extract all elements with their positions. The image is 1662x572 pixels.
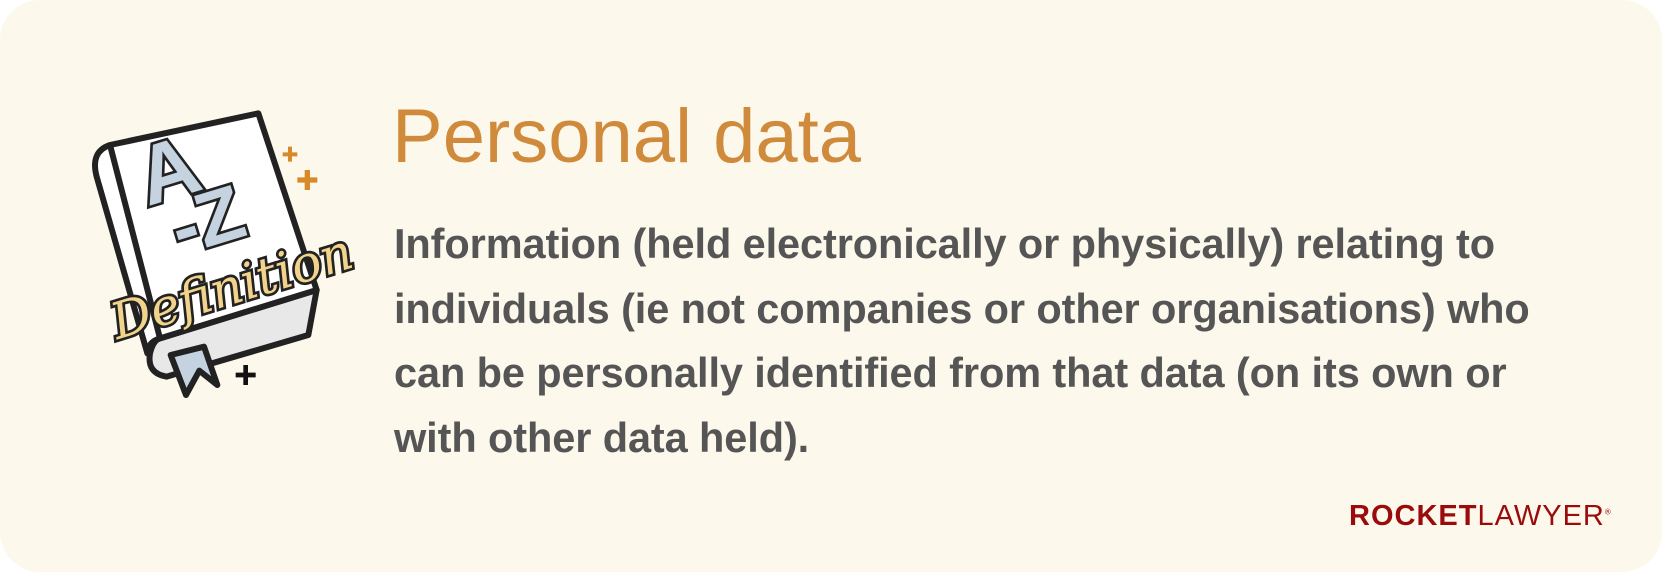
Definition script: Definition	[103, 222, 359, 351]
letters A-Z: -Z	[160, 169, 254, 272]
bookmark	[171, 347, 217, 395]
logo: ROCKETLAWYER®	[1349, 500, 1612, 532]
body text: can be personally identified from that data (on its own or	[394, 349, 1507, 396]
letters A-Z: A	[126, 117, 211, 223]
letters A-Z	[126, 109, 254, 277]
icon: definition book	[92, 110, 359, 398]
book cover	[95, 113, 317, 353]
title: Personal data	[392, 94, 861, 179]
body text: Information (held electronically or physically) relating to	[394, 220, 1495, 267]
body text: individuals (ie not companies or other organisations) who	[394, 284, 1530, 332]
sparkles	[236, 147, 317, 385]
body text: with other data held).	[394, 414, 809, 460]
body text	[394, 220, 1530, 460]
book pages bottom	[150, 290, 317, 377]
